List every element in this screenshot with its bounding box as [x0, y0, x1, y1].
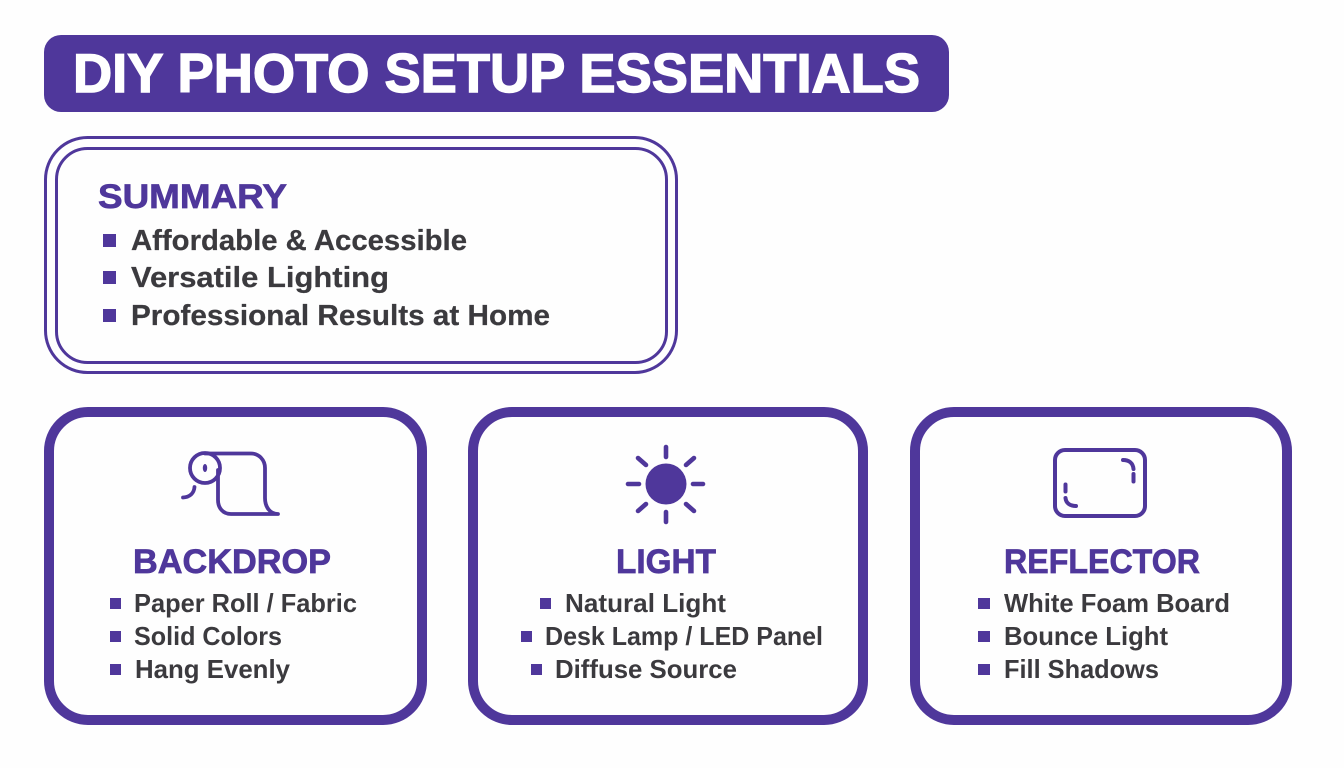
light list: Desk Lamp / LED Panel	[545, 621, 823, 651]
summary list: Affordable & Accessible	[131, 225, 467, 257]
reflector heading: REFLECTOR	[1004, 543, 1200, 581]
title banner: DIY PHOTO SETUP ESSENTIALS	[73, 42, 920, 104]
summary list: Professional Results at Home	[131, 300, 550, 332]
panel: summary	[46, 138, 676, 372]
light list: Diffuse Source	[555, 654, 737, 684]
backdrop heading: BACKDROP	[133, 543, 331, 581]
reflector list	[978, 588, 1230, 684]
summary heading: SUMMARY	[98, 178, 287, 216]
reflector list: White Foam Board	[1004, 588, 1230, 618]
light list	[521, 588, 823, 684]
light list: Natural Light	[565, 588, 726, 618]
panel: backdrop	[49, 412, 422, 720]
backdrop list	[110, 588, 357, 684]
backdrop list: Solid Colors	[134, 621, 282, 651]
panel: reflector	[915, 412, 1287, 720]
reflector list: Bounce Light	[1004, 621, 1168, 651]
panel: light	[473, 412, 863, 720]
reflector list: Fill Shadows	[1004, 654, 1159, 684]
backdrop list: Paper Roll / Fabric	[134, 588, 357, 618]
backdrop list: Hang Evenly	[135, 654, 291, 684]
icon: paper roll	[183, 453, 278, 514]
icon: reflector board	[1055, 450, 1145, 516]
summary list	[103, 225, 550, 332]
summary list: Versatile Lighting	[131, 262, 389, 294]
light heading: LIGHT	[616, 543, 716, 581]
icon: sun	[628, 447, 703, 522]
